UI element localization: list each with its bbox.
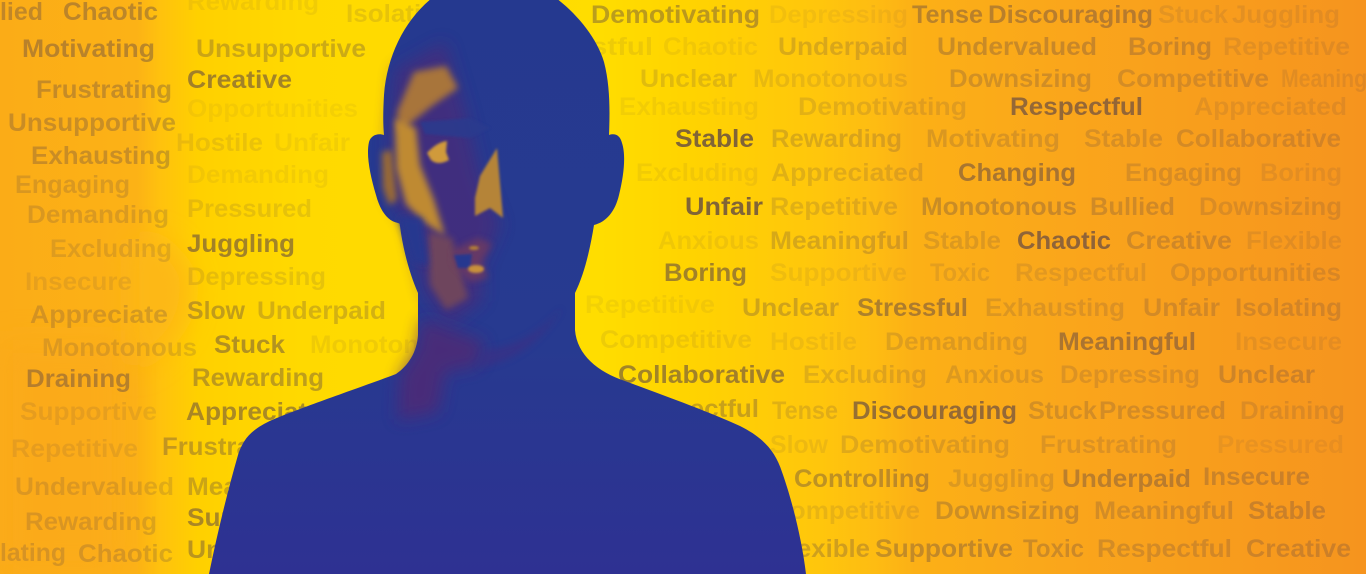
word cloud: right columns: Motivating bbox=[926, 125, 1060, 153]
word cloud: left columns: Slow bbox=[187, 297, 246, 325]
word cloud: right columns: Discouraging bbox=[988, 1, 1153, 29]
word cloud: right columns: Monotonous bbox=[753, 65, 908, 93]
word cloud: left columns: Depressing bbox=[187, 263, 326, 291]
word cloud: left columns: Supportive bbox=[187, 504, 324, 532]
neck fold shadow bbox=[478, 308, 562, 368]
word cloud: left columns: Demanding bbox=[27, 201, 169, 229]
word cloud: right columns: Chaotic bbox=[663, 33, 758, 61]
word cloud: right columns: Stable bbox=[675, 125, 754, 153]
word cloud: right columns: Undervalued bbox=[937, 33, 1097, 61]
word cloud: right columns: Competitive bbox=[600, 326, 752, 354]
word cloud: right columns: Appreciated bbox=[1194, 93, 1347, 121]
word cloud: right columns: Stressful bbox=[857, 294, 968, 322]
word cloud: left columns: Unsupportive bbox=[8, 109, 176, 137]
word cloud: right columns: Flexible bbox=[1246, 227, 1342, 255]
word cloud: left columns: Isolating bbox=[346, 0, 453, 28]
word cloud: right columns: Tense bbox=[772, 397, 838, 425]
word cloud: left columns: Demanding bbox=[187, 161, 329, 189]
word cloud: left columns: Motivating bbox=[22, 35, 155, 63]
word cloud: right columns: Underpaid bbox=[778, 33, 908, 61]
word cloud: right columns: Anxious bbox=[658, 227, 759, 255]
word cloud: right columns: Competitive bbox=[1117, 65, 1269, 93]
word cloud: right columns: Downsizing bbox=[1199, 193, 1342, 221]
face: purple shadow tone bbox=[388, 42, 500, 325]
word cloud: right columns: Monotonous bbox=[921, 193, 1077, 221]
word cloud: left columns: Excluding bbox=[50, 235, 172, 263]
word cloud: right columns: Collaborative bbox=[1176, 125, 1341, 153]
word cloud: left columns: lating bbox=[0, 539, 66, 567]
word cloud: left columns bbox=[0, 0, 465, 568]
word cloud: left columns: Appreciated bbox=[186, 398, 338, 426]
word cloud: right columns: Insecure bbox=[1235, 328, 1342, 356]
word cloud: right columns: Supportive bbox=[875, 535, 1013, 563]
word cloud: left columns: Juggling bbox=[187, 230, 295, 258]
ear highlight bbox=[382, 150, 397, 205]
face: lower cheek and chin bbox=[428, 232, 468, 310]
word cloud: left columns: Engaging bbox=[15, 171, 130, 199]
word cloud: right columns: Downsizing bbox=[935, 497, 1080, 525]
word cloud: left columns: Unsupportive bbox=[196, 35, 366, 63]
word cloud: left columns: Insecure bbox=[25, 268, 132, 296]
word cloud: right columns: Unclear bbox=[640, 65, 737, 93]
word cloud: right columns: Repetitive bbox=[585, 291, 715, 319]
word cloud: right columns: Discouraging bbox=[852, 397, 1017, 425]
word cloud: right columns: Controlling bbox=[794, 465, 930, 493]
word cloud: right columns: Depressing bbox=[1060, 361, 1200, 389]
word cloud: left columns: Stuck bbox=[214, 331, 285, 359]
word cloud: right columns: Juggling bbox=[1232, 1, 1340, 29]
word cloud: left columns: Pressured bbox=[187, 195, 312, 223]
word cloud: right columns: Underpaid bbox=[1062, 465, 1191, 493]
word cloud: right columns: Demanding bbox=[885, 328, 1028, 356]
word cloud: left columns: Unfair bbox=[274, 129, 350, 157]
word cloud: left columns: Underpaid bbox=[257, 297, 386, 325]
word cloud: right columns: Demotivating bbox=[591, 1, 760, 29]
word cloud: right columns: Meaningful bbox=[1058, 328, 1196, 356]
word cloud: right columns: Competitive bbox=[771, 497, 920, 525]
face: brow shadow bbox=[420, 118, 490, 138]
word cloud: right columns: Anxious bbox=[945, 361, 1044, 389]
word cloud: left columns: Unclear bbox=[187, 536, 284, 564]
word cloud: right columns: Bullied bbox=[1090, 193, 1175, 221]
word cloud: right columns: Boring bbox=[1128, 33, 1212, 61]
word cloud: left columns: Draining bbox=[26, 365, 131, 393]
word cloud: left columns: Monotonous bbox=[310, 331, 465, 359]
word cloud: right columns: Respectful bbox=[626, 395, 759, 423]
word cloud: right columns: Slow bbox=[770, 431, 829, 459]
word cloud: right columns: Stable bbox=[923, 227, 1001, 255]
word cloud: right columns: Supportive bbox=[770, 259, 907, 287]
word cloud: left columns: Appreciate bbox=[30, 301, 168, 329]
word cloud: left columns: Frustrating bbox=[36, 76, 172, 104]
word cloud: right columns: Insecure bbox=[1203, 463, 1310, 491]
word cloud: right columns: Pressured bbox=[1099, 397, 1226, 425]
word cloud: right columns: Toxic bbox=[1023, 535, 1084, 563]
word cloud: right columns: Creative bbox=[1126, 227, 1232, 255]
face: lower lip highlight bbox=[468, 265, 484, 273]
silhouette: head, neck and shoulders bbox=[209, 0, 806, 574]
face: cheek highlight bbox=[395, 118, 445, 236]
word cloud: left columns: Repetitive bbox=[11, 435, 138, 463]
face: blue shadow under cheekbone bbox=[398, 216, 428, 266]
word cloud: right columns: Downsizing bbox=[949, 65, 1092, 93]
word cloud: right columns: Respectful bbox=[1097, 535, 1232, 563]
word cloud: right columns: Boring bbox=[1260, 159, 1342, 187]
word cloud: left columns: Meaningful bbox=[187, 473, 325, 501]
word cloud: right columns: Pressured bbox=[1217, 431, 1344, 459]
face: eye bbox=[427, 141, 449, 163]
word cloud: right columns: Demotivating bbox=[840, 431, 1010, 459]
word cloud: left columns: Undervalued bbox=[15, 473, 174, 501]
word cloud: right columns: Unclear bbox=[742, 294, 839, 322]
word cloud: left columns: Exhausting bbox=[31, 142, 171, 170]
word cloud: right columns: Hostile bbox=[770, 328, 857, 356]
word cloud: right columns: Rewarding bbox=[771, 125, 902, 153]
word cloud: right columns: Meaningful bbox=[770, 227, 909, 255]
word cloud: right columns: Stuck bbox=[1028, 397, 1097, 425]
word cloud: right columns: Stable bbox=[1084, 125, 1163, 153]
word cloud: right columns: stful bbox=[591, 33, 653, 61]
word cloud: left columns: Chaotic bbox=[78, 540, 173, 568]
face: mouth bbox=[453, 238, 492, 282]
word cloud: left columns: Monotonous bbox=[42, 334, 197, 362]
word cloud: left columns: Supportive bbox=[20, 398, 157, 426]
word cloud: right columns: Isolating bbox=[1235, 294, 1342, 322]
word cloud: right columns: Flexible bbox=[774, 535, 870, 563]
word cloud: left columns: Rewarding bbox=[25, 508, 157, 536]
word cloud: right columns: Respectful bbox=[1010, 93, 1143, 121]
word cloud: right columns: Unfair bbox=[1143, 294, 1220, 322]
word cloud: right columns: Collaborative bbox=[618, 361, 785, 389]
word cloud: right columns: Toxic bbox=[930, 259, 990, 287]
word cloud: left columns: Hostile bbox=[176, 129, 263, 157]
word cloud: right columns: Demotivating bbox=[798, 93, 967, 121]
word cloud: right columns: Meaningful bbox=[1094, 497, 1234, 525]
word cloud: right columns: Unclear bbox=[1218, 361, 1315, 389]
word cloud: right columns: Repetitive bbox=[770, 193, 898, 221]
word cloud: right columns: Stuck bbox=[1158, 1, 1228, 29]
face: forehead highlight bbox=[397, 66, 458, 134]
word cloud: right columns: Repetitive bbox=[1223, 33, 1350, 61]
word cloud: right columns: Appreciated bbox=[771, 159, 924, 187]
word cloud: right columns: Depressing bbox=[769, 1, 908, 29]
word cloud: right columns: Changing bbox=[958, 159, 1076, 187]
word cloud: right columns: Excluding bbox=[803, 361, 927, 389]
word cloud: left columns: Rewarding bbox=[192, 364, 324, 392]
word cloud: right columns: Chaotic bbox=[1017, 227, 1111, 255]
word cloud: left columns: Opportunities bbox=[187, 95, 358, 123]
word cloud: right columns: Opportunities bbox=[1170, 259, 1341, 287]
word cloud: right columns: Draining bbox=[1240, 397, 1345, 425]
word cloud: right columns: Exhausting bbox=[619, 93, 759, 121]
word cloud: right columns: Juggling bbox=[948, 465, 1055, 493]
word cloud: right columns: Respectful bbox=[1015, 259, 1147, 287]
word cloud: right columns: Creative bbox=[1246, 535, 1351, 563]
word cloud: right columns: Boring bbox=[664, 259, 747, 287]
word cloud: right columns: Stable bbox=[1248, 497, 1326, 525]
face: nose highlight bbox=[475, 148, 503, 218]
word cloud: left columns: Frustrating bbox=[162, 433, 298, 461]
word cloud: right columns: Exhausting bbox=[985, 294, 1125, 322]
word cloud: right columns bbox=[585, 1, 1366, 563]
word cloud: right columns: Tense bbox=[912, 1, 983, 29]
person silhouette with lit face bbox=[209, 0, 806, 574]
word cloud: left columns: Creative bbox=[187, 66, 292, 94]
word cloud: right columns: Unfair bbox=[685, 193, 763, 221]
word cloud: right columns: Engaging bbox=[1125, 159, 1242, 187]
neck and chest shadow bbox=[398, 318, 484, 420]
word cloud: right columns: Excluding bbox=[636, 159, 759, 187]
word cloud: right columns: Frustrating bbox=[1040, 431, 1177, 459]
